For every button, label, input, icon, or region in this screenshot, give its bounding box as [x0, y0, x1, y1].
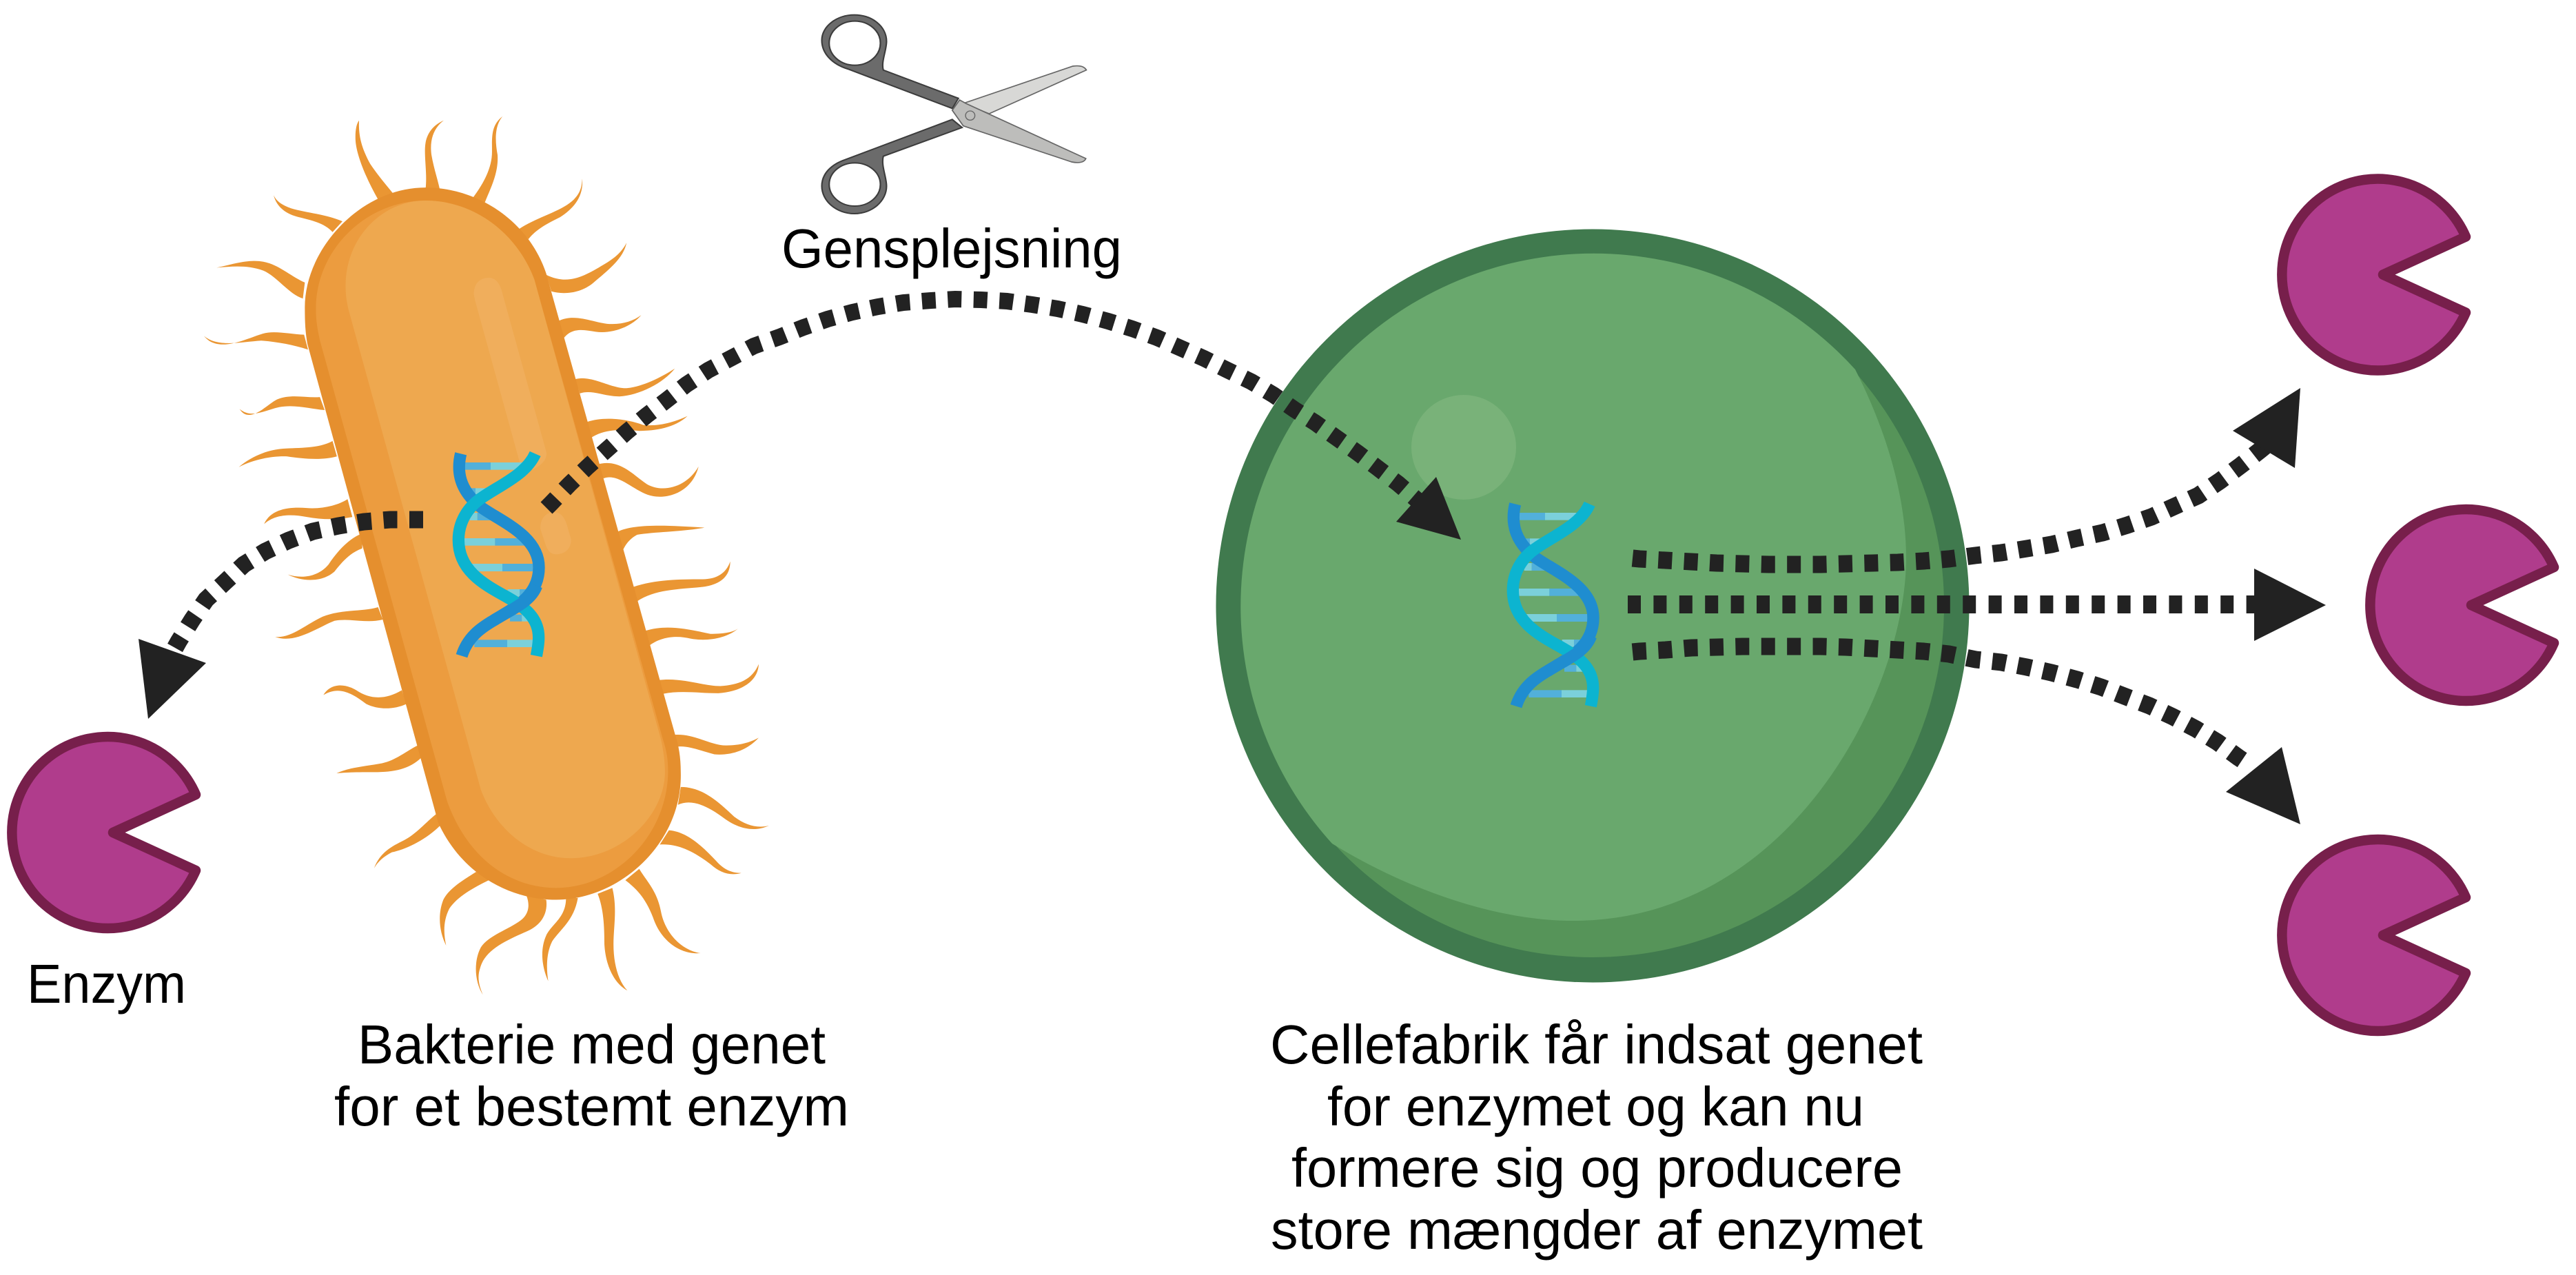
enzyme: bottom right	[2282, 839, 2466, 1031]
dotted line	[1633, 441, 2271, 564]
arrowhead	[2254, 569, 2326, 641]
caption: cell factory	[1270, 1014, 1923, 1261]
arrow: cell to bottom enzyme	[1633, 646, 2300, 824]
dotted line	[175, 520, 423, 648]
DNA blue strand overlap	[1548, 636, 1591, 671]
DNA blue strand	[1513, 504, 1593, 706]
arrow: cell to top enzyme	[1633, 388, 2300, 564]
DNA rungs	[1519, 513, 1587, 697]
dotted line	[1628, 595, 2257, 613]
caption: cell factory: Cellefabrik får indsat genet	[1270, 1014, 1923, 1075]
arrowhead	[2226, 747, 2300, 824]
enzyme: top right	[2282, 179, 2466, 371]
label: enzyme: Enzym	[27, 953, 186, 1014]
flagella	[204, 116, 769, 994]
DNA in bacterium	[458, 453, 539, 656]
lower handle	[821, 119, 962, 214]
cell cytoplasm	[1240, 254, 1906, 921]
bacterium membrane	[305, 187, 681, 900]
arrow: bacterium to enzyme	[139, 520, 423, 719]
bacterium	[204, 116, 769, 994]
caption: bacterium: Bakterie med genet	[358, 1014, 826, 1075]
cell wall	[1216, 229, 1970, 983]
arrowhead	[2233, 388, 2300, 468]
label: gene splicing: Gensplejsning	[781, 218, 1122, 279]
caption: bacterium: for et bestemt enzym	[334, 1076, 849, 1137]
cell inner shade	[1241, 254, 1944, 957]
DNA blue strand	[459, 453, 539, 656]
arrow: gene splicing into cell	[546, 299, 1461, 540]
cell highlight	[1411, 395, 1516, 500]
DNA rungs	[464, 462, 533, 647]
cell factory	[1216, 229, 1970, 983]
arrowhead	[139, 639, 206, 719]
DNA in cell	[1513, 504, 1593, 706]
DNA cyan strand	[1513, 504, 1593, 706]
caption: cell factory: for enzymet og kan nu	[1327, 1076, 1864, 1137]
bacterium body light	[345, 201, 665, 858]
scissors icon	[821, 15, 1086, 214]
bacterium highlights	[474, 278, 571, 554]
pivot screw	[965, 111, 975, 120]
enzyme: middle right	[2370, 509, 2554, 701]
DNA blue strand overlap	[494, 586, 537, 620]
lower blade and pivot	[952, 100, 1086, 163]
enzyme: left	[12, 737, 196, 928]
caption: cell factory: store mængder af enzymet	[1271, 1199, 1923, 1261]
upper handle	[821, 15, 959, 108]
dotted line	[546, 299, 1428, 510]
dotted line	[1633, 646, 2245, 762]
caption: bacterium	[334, 1014, 849, 1137]
bacterium body shade	[316, 201, 668, 888]
caption: cell factory: formere sig og producere	[1291, 1137, 1903, 1198]
arrow: cell to middle enzyme	[1628, 569, 2326, 641]
arrowhead	[1396, 477, 1461, 540]
DNA cyan strand	[458, 453, 539, 656]
upper blade	[963, 66, 1086, 114]
